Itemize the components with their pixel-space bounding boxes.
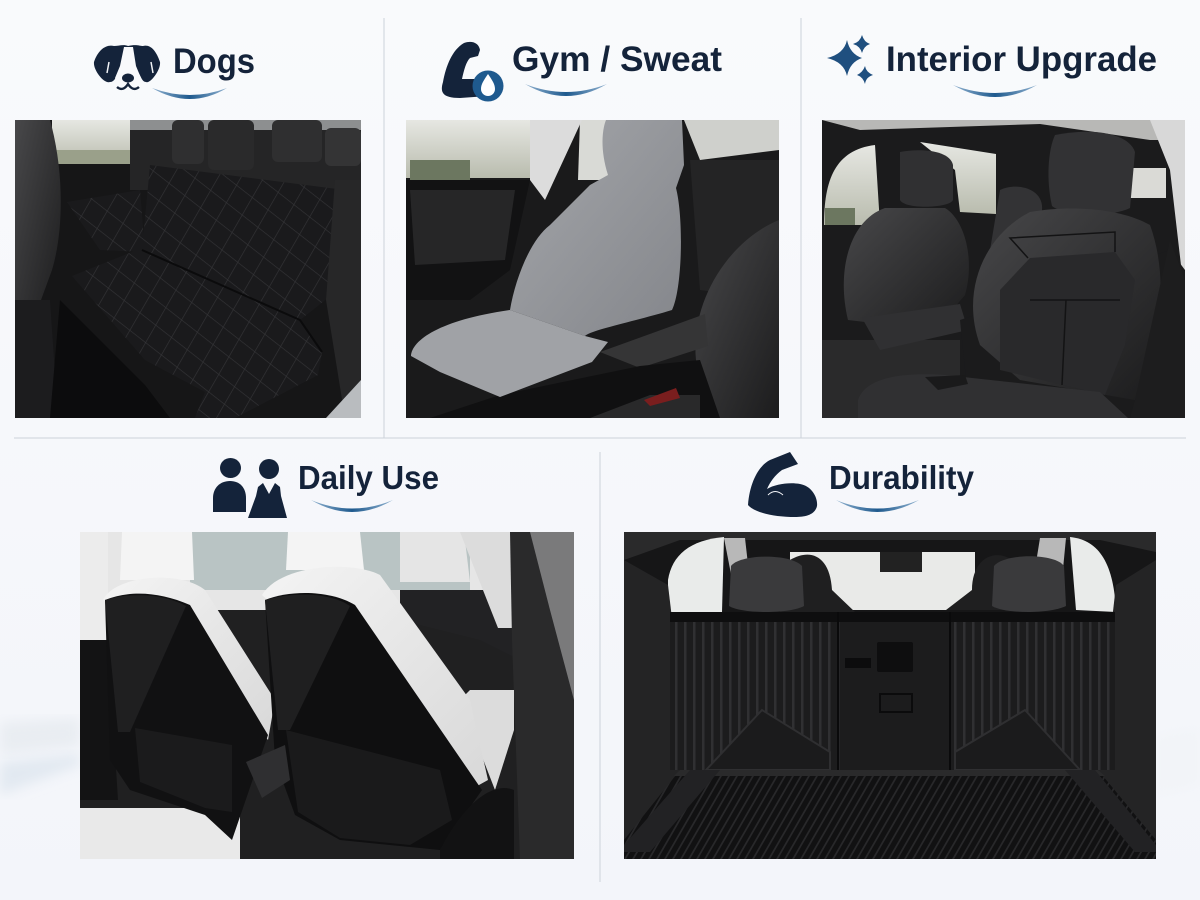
icon: dog face [94,45,160,89]
swoosh [953,85,1037,97]
swoosh [152,88,227,99]
swoosh [311,500,393,512]
photo: rubber boot and seat back liner [624,532,1156,859]
heading: Interior Upgrade [827,35,1157,97]
heading text: Interior Upgrade [886,40,1157,79]
photo: black leather seats [822,120,1185,418]
icon: two people [213,458,287,518]
heading: Gym / Sweat [442,40,722,102]
icon: flexed bicep [748,452,817,517]
photo: quilted dog hammock on rear seat [15,120,361,418]
swoosh [836,500,919,512]
photo: grey towel cover on front seat [406,120,779,418]
icon: arm with drop [442,42,504,102]
heading text: Durability [829,459,975,496]
swoosh [525,84,607,96]
heading text: Gym / Sweat [512,40,722,79]
heading: Daily Use [213,458,439,518]
heading text: Daily Use [298,459,439,496]
heading: Dogs [94,42,255,99]
heading: Durability [748,452,975,517]
heading text: Dogs [173,42,255,81]
icon: sparkles [827,35,873,84]
photo: seat back kick protectors [80,532,574,859]
